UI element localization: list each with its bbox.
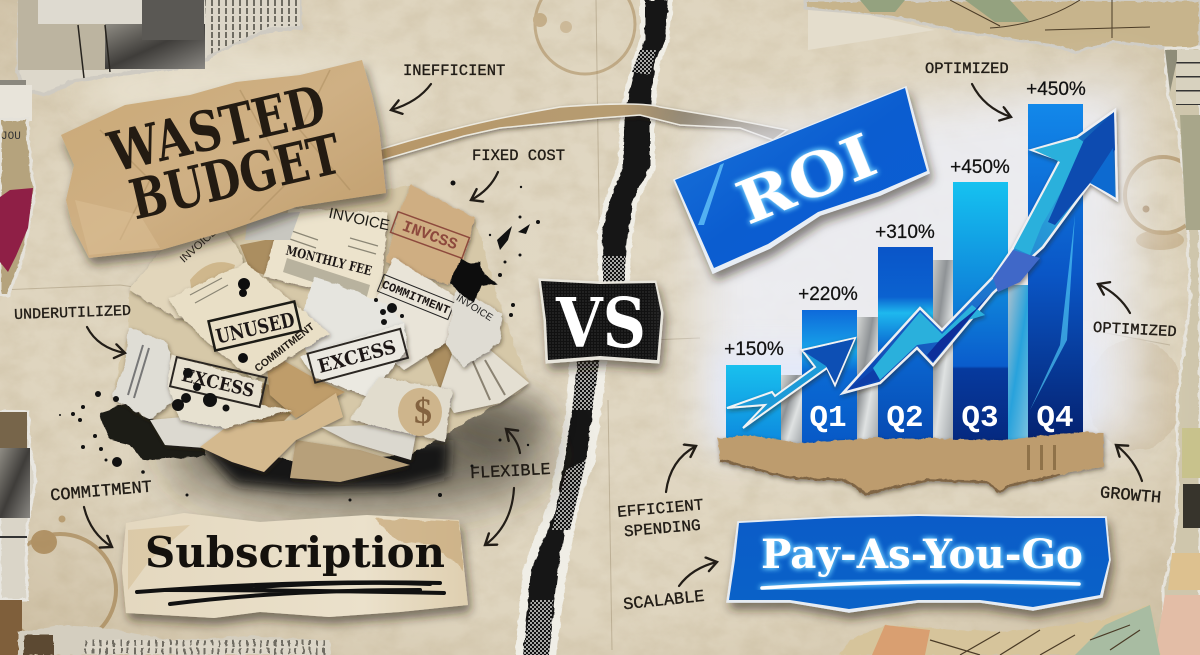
invoice: upper left: INVOICE (178, 226, 219, 265)
bar chart: quarterly ROI (724, 79, 1086, 447)
invoice: commitment stamp: COMMITMENT (380, 278, 452, 318)
foil strips (781, 260, 1030, 445)
collage: left side scrap with red stain (0, 85, 35, 295)
label: efficient spending (617, 496, 706, 542)
invoice: dollar sign (350, 377, 452, 442)
paper: unused invoice (168, 263, 329, 380)
ink shadow under paper pile (100, 390, 550, 510)
cardboard base (718, 432, 1103, 494)
label: optimized right: OPTIMIZED (1093, 319, 1177, 341)
VS badge: VS (555, 284, 646, 364)
arrow segment: dark blue head (1048, 112, 1115, 225)
value labels: +450% (1026, 79, 1086, 100)
value labels: +150% (724, 339, 784, 360)
collage: right side newspaper and map (1155, 48, 1200, 655)
value labels: +450% (950, 157, 1010, 178)
heading: wasted budget: WASTED (102, 72, 331, 185)
small growth arrow (727, 338, 855, 428)
heading: wasted budget (102, 71, 347, 235)
paper: mid-bottom stained (200, 393, 343, 472)
heading: wasted budget: BUDGET (124, 121, 347, 232)
panel: wasted budget kraft paper (61, 60, 386, 258)
paper: lower layered sheets (290, 440, 410, 482)
heading: subscription: Subscription (145, 528, 445, 577)
arrow segment: periwinkle (993, 250, 1040, 292)
label: growth: GROWTH (1099, 484, 1162, 509)
invoice: excess right (300, 323, 408, 397)
panel: pay-as-you-go label (727, 515, 1110, 612)
label: commitment: COMMITMENT (50, 478, 153, 506)
arrow: flexible down (485, 488, 514, 545)
label: inefficient: INEFFICIENT (403, 62, 505, 80)
collage: bottom-right map (840, 605, 1160, 655)
collage: top-left newspaper scraps (0, 0, 300, 95)
coffee stain: lower right (1087, 339, 1183, 451)
paper: pile base (112, 185, 529, 462)
collage: lower-left photo and clipping (0, 412, 36, 655)
coffee ring: right (1125, 157, 1200, 250)
invoice: right white: INVOICE (454, 293, 495, 324)
invoice: top right, monthly fee: MONTHLY FEE (284, 244, 373, 279)
invoice: excess right: EXCESS (316, 336, 398, 378)
value labels: +220% (798, 284, 858, 305)
paper: tan centre (265, 350, 345, 418)
quarter labels: Q3 (961, 401, 999, 436)
glowing underline (762, 582, 1079, 588)
arrow: optimized top (972, 84, 1011, 117)
invoice: top right, monthly fee (264, 205, 391, 303)
light streak on Q4 (1030, 215, 1075, 410)
label: efficient spending: EFFICIENT (617, 496, 704, 522)
invoice: dollar sign: $ (414, 391, 432, 431)
quarter labels (809, 401, 1074, 436)
paper: scorched backing sheet (235, 235, 480, 425)
chart glow (700, 80, 1140, 450)
collage: top-right map (805, 0, 1200, 52)
paper: bottom white (321, 423, 418, 460)
paper: grey scrap (245, 212, 300, 240)
heading: pay-as-you-go: Pay-As-You-Go (761, 531, 1083, 578)
central torn black strip (520, 0, 668, 655)
quarter labels: Q1 (809, 401, 847, 436)
quarter labels: Q4 (1036, 401, 1074, 436)
paper pile: crumpled invoices (112, 185, 529, 482)
label: flexible: FLEXIBLE (470, 461, 551, 484)
label: optimized top: OPTIMIZED (925, 60, 1009, 78)
arrow: fixed cost (471, 172, 498, 200)
label: fixed cost: FIXED COST (472, 147, 565, 165)
arrow: underutilized (87, 327, 125, 353)
panel: subscription label (122, 513, 468, 618)
paper: left white (112, 327, 175, 420)
paper: unused invoice: COMMITMENT (252, 320, 317, 375)
arrow: inefficient (391, 84, 431, 110)
paper: unused invoice: UNUSED (214, 307, 297, 349)
label: scalable: SCALABLE (622, 588, 706, 615)
arrow: scalable (679, 562, 717, 586)
arrow segment: navy middle (927, 294, 990, 362)
invoice: burnt red stamp: INVCSS (400, 218, 460, 254)
arrow: efficient spending (666, 446, 696, 492)
panel: ROI torn banner (674, 87, 929, 273)
paper: cream wedge right (440, 343, 529, 413)
invoice: right white (446, 287, 502, 367)
invoice: commitment stamp (371, 257, 457, 370)
invoice: excess left: EXCESS (179, 365, 256, 402)
invoice: top right, monthly fee: INVOICE (327, 205, 391, 234)
paper: lower white left (150, 415, 235, 448)
large growth arrow (843, 110, 1117, 393)
scribble underline (137, 582, 444, 604)
bar: Q3 (953, 182, 1008, 445)
bar: Q2 (878, 247, 933, 447)
coffee ring: bottom left (4, 516, 116, 646)
bar: Q4 (1028, 104, 1083, 444)
label: underutilized: UNDERUTILIZED (14, 303, 131, 324)
heading: ROI: ROI (727, 121, 886, 239)
arrow segment: cyan upper (1014, 138, 1088, 255)
ink splatters (59, 180, 540, 502)
collage: bottom newspaper (18, 625, 330, 655)
collage: left side scrap with red stain: JOU (1, 131, 21, 143)
arrow: optimized right (1098, 284, 1130, 313)
quarter labels: Q2 (886, 401, 924, 436)
arrow: growth (1116, 445, 1142, 481)
torn ribbon linking budget and ROI (378, 104, 787, 160)
invoice: upper left (129, 225, 243, 318)
value labels (724, 79, 1086, 360)
paper: white crumple centre (300, 277, 407, 385)
coffee ring: top centre (533, 0, 635, 74)
arrow: flexible up (506, 429, 520, 453)
arrow segment: navy tail (848, 370, 884, 390)
invoice: excess left (168, 355, 293, 428)
bar: Q1 (802, 310, 857, 447)
value labels: +310% (875, 222, 935, 243)
arrow segment: cyan lower (873, 305, 985, 380)
arrow: commitment (84, 507, 112, 547)
bar: start (726, 365, 781, 447)
label: efficient spending: SPENDING (623, 517, 701, 541)
invoice: burnt red stamp (386, 185, 475, 285)
